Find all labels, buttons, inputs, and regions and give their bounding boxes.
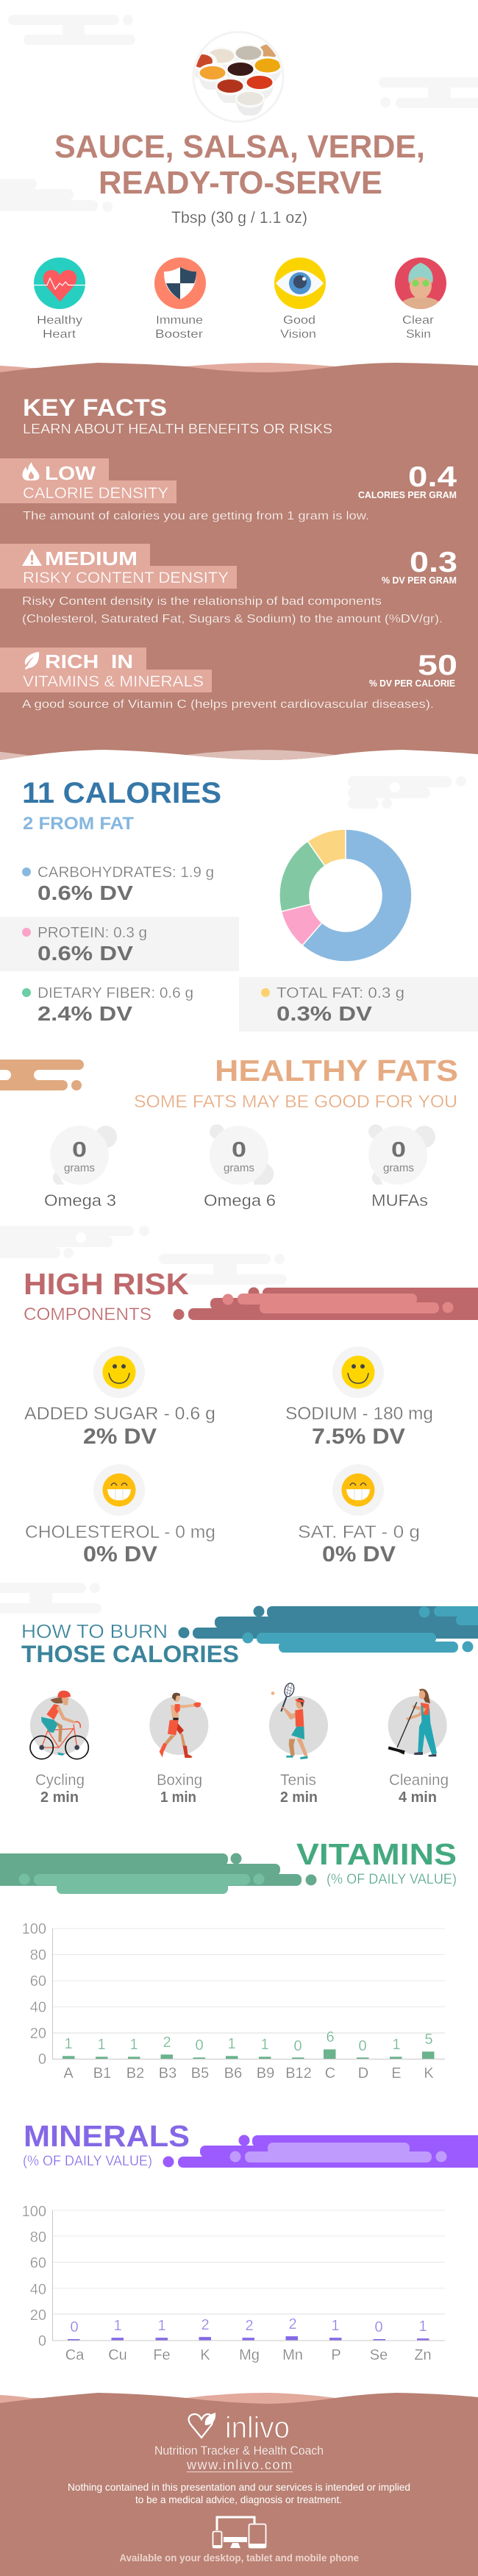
fat: mufas: 0 xyxy=(391,1138,406,1162)
bar chart: vitamins: C xyxy=(325,2065,335,2082)
fact: low calorie density: The amount of calories you are getting from 1 gram is low. xyxy=(23,510,369,522)
benefit: healthy heart xyxy=(34,258,85,341)
banner shape: burn calories xyxy=(178,1605,478,1653)
bar chart: vitamins: B12 xyxy=(285,2065,312,2082)
bar chart: minerals: Ca xyxy=(65,2347,85,2363)
bar chart: vitamins: 60 xyxy=(30,1973,46,1990)
bar chart: minerals: Mg xyxy=(239,2347,260,2363)
risk: saturated fat: 0% DV xyxy=(322,1542,396,1566)
bar chart: minerals: 40 xyxy=(30,2282,46,2298)
risk: cholesterol: 0% DV xyxy=(83,1542,157,1566)
bar chart: vitamins: B2 xyxy=(126,2065,144,2082)
banner shape: vitamins xyxy=(0,1853,316,1894)
fat: omega 3: grams xyxy=(64,1162,95,1174)
subheading: key facts: LEARN ABOUT HEALTH BENEFITS OR RISKS xyxy=(23,422,332,436)
risk: added sugar: ADDED SUGAR - 0.6 g xyxy=(24,1404,215,1424)
heading: 11 calories: 11 CALORIES xyxy=(22,777,221,809)
bar chart: vitamins: 1 xyxy=(227,2036,236,2052)
risk: sodium: 7.5% DV xyxy=(312,1424,405,1449)
fat: omega 6: 0 xyxy=(232,1138,246,1162)
bar chart: vitamins: E xyxy=(391,2065,402,2082)
risk: sodium: SODIUM - 180 mg xyxy=(285,1404,433,1424)
bar chart: vitamins: 1 xyxy=(64,2036,73,2052)
bar chart: vitamins: 1 xyxy=(129,2037,138,2053)
fact: medium risky content density xyxy=(0,544,457,625)
title: SAUCE, SALSA, VERDE, xyxy=(54,129,425,165)
heading: how to burn: HOW TO BURN xyxy=(21,1620,168,1642)
fact: rich in vitamins and minerals: RICH IN xyxy=(45,650,133,673)
background cloud: calories xyxy=(348,776,466,809)
subheading: minerals daily value: (% OF DAILY VALUE) xyxy=(23,2153,152,2169)
legend: dietary fiber xyxy=(22,985,193,1025)
fact: rich in vitamins and minerals: 50 xyxy=(418,650,457,681)
fact: rich in vitamins and minerals xyxy=(0,647,457,711)
benefit: good vision xyxy=(274,258,326,341)
benefit: immune booster xyxy=(154,258,206,341)
legend: protein: 0.6% DV xyxy=(38,942,133,965)
bar chart: minerals: 20 xyxy=(30,2307,46,2324)
fat: omega 6 xyxy=(204,1124,276,1210)
bar chart: vitamins: B3 xyxy=(159,2065,176,2082)
activity: boxing: 1 min xyxy=(160,1789,196,1806)
bar chart: vitamins: 1 xyxy=(97,2037,106,2053)
fact: medium risky content density: MEDIUM xyxy=(45,547,138,570)
bar chart: vitamins: D xyxy=(358,2065,368,2082)
benefit: immune booster: Immune xyxy=(156,314,203,327)
risk: cholesterol xyxy=(25,1464,215,1566)
heading: minerals: MINERALS xyxy=(24,2119,190,2153)
bar chart: minerals: 1 xyxy=(113,2318,122,2334)
background cloud: mid left xyxy=(0,179,113,212)
bar chart: minerals: K xyxy=(200,2347,210,2363)
benefit: healthy heart: Healthy xyxy=(37,314,82,327)
legend: protein xyxy=(0,917,239,971)
fact: low calorie density xyxy=(0,458,457,522)
caption: availability: Available on your desktop, tablet and mobile phone xyxy=(119,2552,359,2563)
legend: carbohydrates: 0.6% DV xyxy=(38,881,133,904)
legend: total fat: TOTAL FAT: 0.3 g xyxy=(277,985,404,1001)
bar chart: vitamins: A xyxy=(63,2065,74,2082)
heading: vitamins: VITAMINS xyxy=(296,1837,457,1871)
fat: omega 3: Omega 3 xyxy=(44,1191,116,1210)
heading: those calories: THOSE CALORIES xyxy=(21,1641,239,1667)
bar chart: vitamins: 1 xyxy=(260,2037,269,2053)
fat: mufas xyxy=(368,1124,435,1210)
bar chart: minerals: Cu xyxy=(108,2347,127,2363)
legend: carbohydrates: CARBOHYDRATES: 1.9 g xyxy=(38,865,214,881)
website link: www.inlivo.com xyxy=(186,2458,292,2472)
bar chart: minerals: 100 xyxy=(22,2204,46,2220)
activity: cycling: 2 min xyxy=(40,1789,79,1806)
heading: key facts: KEY FACTS xyxy=(23,394,167,421)
panel: footer xyxy=(0,2393,478,2576)
benefit: good vision: Vision xyxy=(280,328,316,341)
bar chart: minerals: Zn xyxy=(414,2347,432,2363)
fat: omega 6: grams xyxy=(224,1162,254,1174)
background cloud: above burn section xyxy=(0,1583,101,1614)
legend: total fat: 0.3% DV xyxy=(277,1002,372,1025)
bar chart: minerals: 2 xyxy=(245,2318,254,2334)
fact: low calorie density: LOW xyxy=(45,462,96,484)
bar chart: vitamins: 80 xyxy=(30,1947,46,1963)
benefit: clear skin: Skin xyxy=(406,328,431,341)
banner shape: high risk xyxy=(174,1288,478,1320)
bar chart: minerals: 60 xyxy=(30,2255,46,2271)
activity: boxing xyxy=(149,1693,208,1806)
fat: omega 6: Omega 6 xyxy=(204,1191,276,1210)
fat: omega 3: 0 xyxy=(72,1138,87,1162)
subheading: healthy fats: SOME FATS MAY BE GOOD FOR YOU xyxy=(134,1092,457,1112)
activity: tennis xyxy=(269,1682,328,1806)
background cloud: top left xyxy=(8,15,135,45)
bar chart: vitamins: B5 xyxy=(191,2065,209,2082)
disclaimer: to be a medical advice, diagnosis or treatment. xyxy=(135,2494,342,2505)
bar chart: minerals: 2 xyxy=(288,2316,297,2332)
bar chart: minerals: 0 xyxy=(70,2319,79,2335)
fact: low calorie density: CALORIES PER GRAM xyxy=(358,490,457,500)
risk: sodium xyxy=(285,1346,433,1449)
fact: rich in vitamins and minerals: A good source of Vitamin C (helps prevent cardiovascular diseases). xyxy=(22,698,434,711)
bar chart: vitamins: 1 xyxy=(392,2037,401,2053)
bar chart: minerals: 0 xyxy=(374,2319,383,2335)
tagline: Nutrition Tracker & Health Coach xyxy=(154,2444,324,2458)
fact: medium risky content density: Risky Content density is the relationship of bad components xyxy=(22,595,382,608)
bar chart: vitamins xyxy=(22,1921,445,2082)
legend: dietary fiber: 2.4% DV xyxy=(38,1002,132,1025)
bar chart: minerals: Fe xyxy=(153,2347,171,2363)
fact: rich in vitamins and minerals: % DV PER CALORIE xyxy=(369,678,455,689)
fact: medium risky content density: 0.3 xyxy=(410,547,457,578)
activity: cycling xyxy=(30,1691,89,1806)
fact: low calorie density: CALORIE DENSITY xyxy=(23,485,168,502)
background cloud: above high risk, left xyxy=(0,1226,149,1258)
legend: dietary fiber: DIETARY FIBER: 0.6 g xyxy=(38,985,193,1001)
bar chart: minerals: 1 xyxy=(157,2318,166,2334)
fat: omega 3 xyxy=(44,1126,117,1210)
bar chart: vitamins: 6 xyxy=(326,2029,335,2045)
title: READY-TO-SERVE xyxy=(99,165,382,201)
bar chart: minerals: 1 xyxy=(331,2318,340,2334)
bar chart: vitamins: B9 xyxy=(257,2065,274,2082)
bar chart: minerals: P xyxy=(331,2347,341,2363)
risk: added sugar: 2% DV xyxy=(83,1424,157,1449)
title xyxy=(54,129,425,201)
panel: key facts xyxy=(0,363,478,760)
benefit: healthy heart: Heart xyxy=(43,328,76,341)
bar chart: minerals xyxy=(22,2204,445,2363)
fact: rich in vitamins and minerals: VITAMINS & MINERALS xyxy=(23,673,204,690)
activity: tennis: Tenis xyxy=(280,1772,316,1789)
bar chart: minerals: 0 xyxy=(38,2333,46,2349)
bar chart: vitamins: B6 xyxy=(224,2065,242,2082)
disclaimer xyxy=(68,2481,410,2505)
icon: devices xyxy=(213,2517,266,2548)
bar chart: vitamins: 100 xyxy=(22,1921,46,1937)
bar chart: vitamins: 5 xyxy=(424,2032,433,2048)
bar chart: vitamins: K xyxy=(424,2065,434,2082)
subheading: 2 from fat: 2 FROM FAT xyxy=(23,814,134,834)
fact: medium risky content density: (Cholesterol, Saturated Fat, Sugars & Sodium) to the amount (%DV/gr). xyxy=(22,613,443,625)
bar chart: vitamins: 0 xyxy=(38,2051,46,2068)
fact: low calorie density: 0.4 xyxy=(408,461,457,493)
heading: healthy fats: HEALTHY FATS xyxy=(215,1054,458,1087)
bar chart: vitamins: 2 xyxy=(163,2034,171,2051)
bar chart: vitamins: 0 xyxy=(195,2037,204,2054)
bar chart: vitamins: 0 xyxy=(293,2038,302,2054)
banner shape: healthy fats xyxy=(0,1060,84,1090)
bar chart: vitamins: 40 xyxy=(30,2000,46,2016)
subheading: vitamins daily value: (% OF DAILY VALUE) xyxy=(327,1871,457,1887)
activity: boxing: Boxing xyxy=(157,1772,202,1789)
fact: medium risky content density: RISKY CONTENT DENSITY xyxy=(23,570,229,586)
bar chart: vitamins: B1 xyxy=(93,2065,111,2082)
background cloud: top right xyxy=(379,77,478,108)
benefit: clear skin: Clear xyxy=(402,314,435,327)
risk: cholesterol: CHOLESTEROL - 0 mg xyxy=(25,1522,215,1542)
disclaimer: Nothing contained in this presentation and our services is intended or implied xyxy=(68,2481,410,2493)
serving size: Tbsp (30 g / 1.1 oz) xyxy=(171,208,307,227)
legend: protein: PROTEIN: 0.3 g xyxy=(38,925,147,941)
fact: medium risky content density: % DV PER GRAM xyxy=(382,575,457,586)
logo: inlivo xyxy=(189,2410,290,2444)
bar chart: minerals: Se xyxy=(370,2347,388,2363)
legend: carbohydrates xyxy=(22,865,214,904)
bar chart: vitamins: 20 xyxy=(30,2026,46,2042)
photo: bowls of sauces xyxy=(188,32,284,122)
bar chart: minerals: Mn xyxy=(282,2347,303,2363)
bar chart: minerals: 1 xyxy=(418,2318,427,2335)
heading: high risk: HIGH RISK xyxy=(24,1267,189,1301)
benefit: good vision: Good xyxy=(283,314,315,327)
fat: mufas: MUFAs xyxy=(371,1191,428,1210)
activity: cycling: Cycling xyxy=(35,1772,85,1789)
bar chart: minerals: 2 xyxy=(201,2317,210,2333)
bar chart: vitamins: 0 xyxy=(358,2038,367,2054)
subheading: components: COMPONENTS xyxy=(24,1305,151,1324)
activity: cleaning: 4 min xyxy=(399,1789,437,1806)
donut chart: macronutrients xyxy=(279,829,412,962)
benefit: clear skin xyxy=(395,258,446,341)
risk: saturated fat xyxy=(298,1464,420,1566)
bar chart: minerals: 80 xyxy=(30,2229,46,2246)
background cloud: above high risk, right xyxy=(159,1254,287,1285)
activity: cleaning xyxy=(388,1689,449,1806)
legend: total fat xyxy=(239,977,478,1032)
activity: tennis: 2 min xyxy=(280,1789,318,1806)
risk: added sugar xyxy=(24,1346,215,1449)
banner shape: minerals xyxy=(163,2135,478,2168)
activity: cleaning: Cleaning xyxy=(389,1772,449,1789)
benefit: immune booster: Booster xyxy=(155,328,204,341)
logo: inlivo: inlivo xyxy=(225,2410,290,2444)
risk: saturated fat: SAT. FAT - 0 g xyxy=(298,1522,420,1542)
fat: mufas: grams xyxy=(383,1162,414,1174)
